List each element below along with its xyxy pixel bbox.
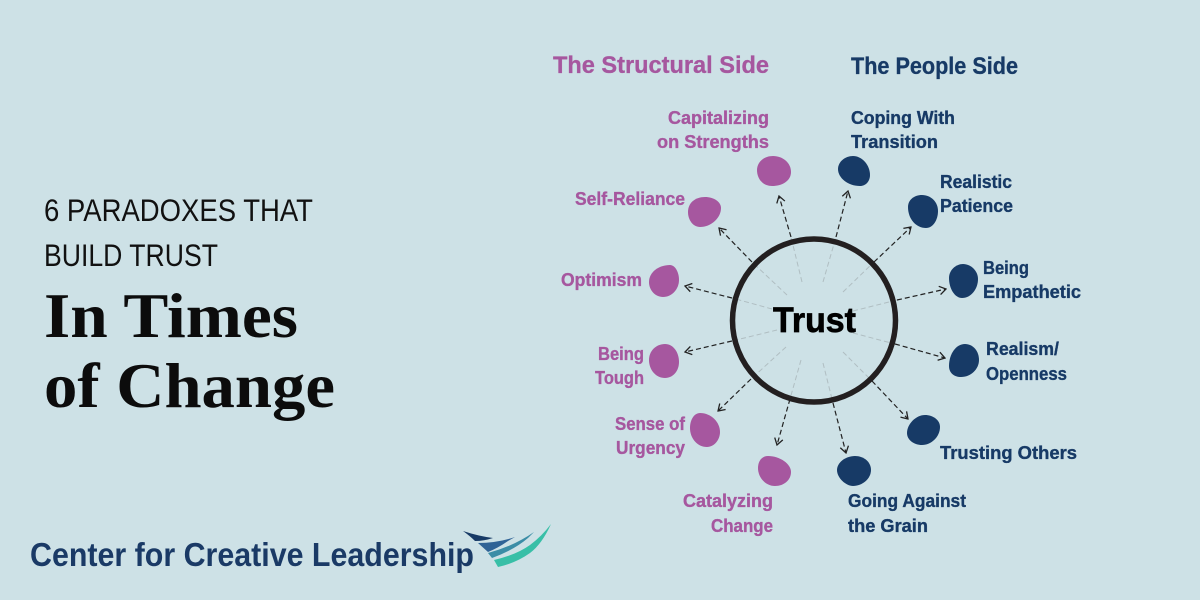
central trust circle: [732, 239, 896, 402]
item: coping with transition: Coping With: [851, 107, 955, 128]
item: being empathetic: Empathetic: [983, 281, 1081, 302]
item: sense of urgency: Urgency: [616, 437, 686, 458]
item: trusting others: Trusting Others: [940, 442, 1077, 463]
item: being empathetic: Being: [983, 257, 1029, 278]
item: trusting others: [907, 415, 1077, 463]
item: realism / openness: Openness: [986, 363, 1067, 384]
item: realistic patience: [908, 171, 1013, 228]
item: capitalizing on strengths: Capitalizing: [668, 107, 769, 128]
item: capitalizing on strengths: on Strengths: [657, 131, 769, 152]
item: being tough: Being: [598, 343, 644, 364]
item: being tough: [595, 343, 679, 388]
heading: the people side: The People Side: [851, 53, 1018, 80]
heading: the structural side: The Structural Side: [553, 52, 769, 79]
item: realistic patience: Realistic: [940, 171, 1012, 192]
item: being tough: Tough: [595, 367, 644, 388]
item: capitalizing on strengths: [657, 107, 791, 186]
item: coping with transition: [838, 107, 955, 186]
arrows radiating from trust: [685, 191, 946, 453]
item: realism / openness: [949, 338, 1067, 384]
item: optimism: [561, 265, 679, 297]
item: going against the grain: [837, 456, 966, 536]
item: being empathetic: [949, 257, 1081, 302]
title: in times of change: [44, 281, 335, 421]
logo: Center for Creative Leadership: [30, 524, 551, 573]
title: 6 paradoxes that build trust: [44, 192, 313, 273]
title block: [44, 192, 335, 421]
item: catalyzing change: Change: [711, 515, 773, 536]
central trust circle: Trust: [773, 301, 856, 340]
item: catalyzing change: [683, 456, 791, 536]
item: realism / openness: Realism/: [986, 338, 1059, 359]
item: self-reliance: Self-Reliance: [575, 188, 685, 209]
item: coping with transition: Transition: [851, 131, 938, 152]
structural side items: [561, 107, 791, 536]
title: in times of change: of Change: [44, 351, 335, 421]
item: going against the grain: the Grain: [848, 515, 928, 536]
title: 6 paradoxes that build trust: 6 PARADOXES THAT: [44, 192, 313, 228]
item: sense of urgency: Sense of: [615, 413, 686, 434]
item: optimism: Optimism: [561, 269, 642, 290]
title: 6 paradoxes that build trust: BUILD TRUST: [44, 237, 218, 273]
item: self-reliance: [575, 188, 721, 227]
people side items: [837, 107, 1081, 536]
item: going against the grain: Going Against: [848, 490, 966, 511]
logo: Center for Creative Leadership: Center for Creative Leadership: [30, 536, 474, 573]
item: sense of urgency: [615, 413, 720, 458]
item: realistic patience: Patience: [940, 195, 1013, 216]
title: in times of change: In Times: [44, 281, 298, 351]
item: catalyzing change: Catalyzing: [683, 490, 773, 511]
